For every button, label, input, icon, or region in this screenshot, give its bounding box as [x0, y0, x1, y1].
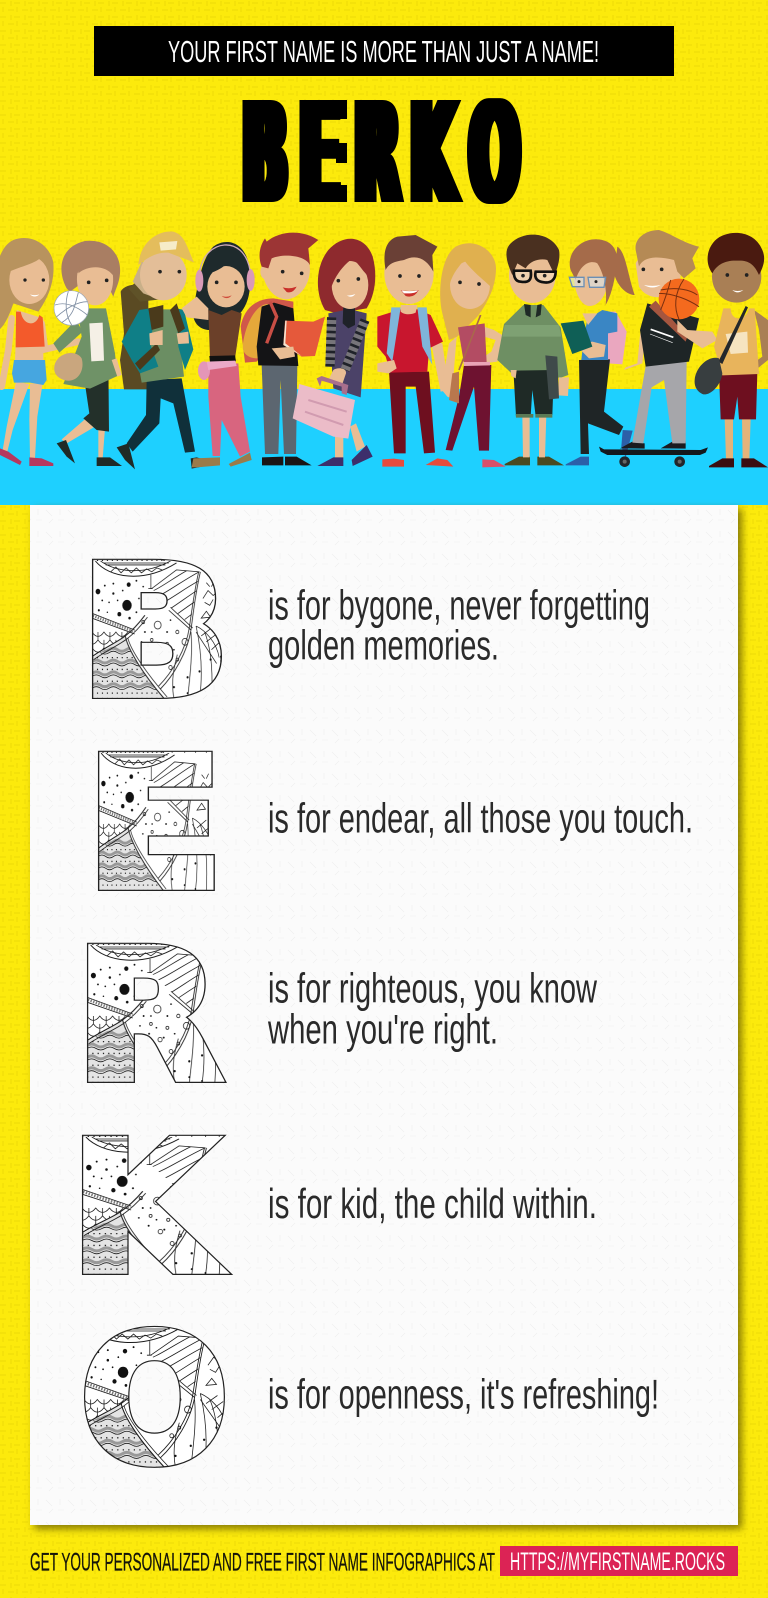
decorated letter E: E — [86, 722, 223, 927]
row E — [86, 722, 693, 927]
decorated letter B: B — [81, 530, 229, 735]
decorated letter O: O — [81, 1300, 228, 1500]
text R — [267, 965, 597, 1053]
text R: is for righteous, you know — [268, 965, 597, 1012]
title: BERKO — [243, 73, 520, 236]
decorated letter R: R — [76, 913, 220, 1119]
people left half — [0, 232, 375, 469]
text B: golden memories. — [268, 622, 499, 669]
row K — [71, 1107, 597, 1311]
group of people illustration — [0, 230, 768, 469]
text R: when you're right. — [267, 1006, 498, 1053]
person 5: boy reading a book — [241, 233, 325, 465]
person 6: girl with pink bag — [293, 239, 375, 466]
decorated letter K: K — [71, 1107, 219, 1311]
row B — [81, 530, 650, 735]
floor band — [0, 389, 768, 505]
person 10: girl with ponytail, book and skateboard foot — [561, 239, 635, 465]
person 9: boy with glasses and green sweater — [497, 235, 569, 465]
person 12: boy in yellow tank top with bag — [695, 233, 768, 467]
decorated letter K: K — [71, 1107, 219, 1311]
text B — [268, 581, 650, 669]
person 8: blonde girl — [440, 243, 506, 467]
person 7: boy in red tee — [377, 235, 453, 467]
row O — [81, 1300, 659, 1500]
footer — [30, 1546, 738, 1576]
tagline banner — [94, 26, 674, 76]
person 2: girl with volleyball — [53, 241, 122, 466]
person 3: boy with cap and backpack — [117, 232, 218, 469]
main content panel — [30, 505, 738, 1525]
person 1: girl in orange top — [0, 238, 78, 466]
text K: is for kid, the child within. — [268, 1180, 597, 1227]
decorated letter B: B — [81, 530, 229, 735]
people right half — [377, 230, 768, 467]
row R — [76, 913, 597, 1119]
decorated letter O: O — [81, 1300, 228, 1500]
person 4: girl with headphones — [182, 242, 255, 467]
decorated letter R: R — [76, 913, 220, 1119]
decorated letter E: E — [86, 722, 223, 927]
person 11: skateboarder with basketball — [599, 230, 717, 467]
